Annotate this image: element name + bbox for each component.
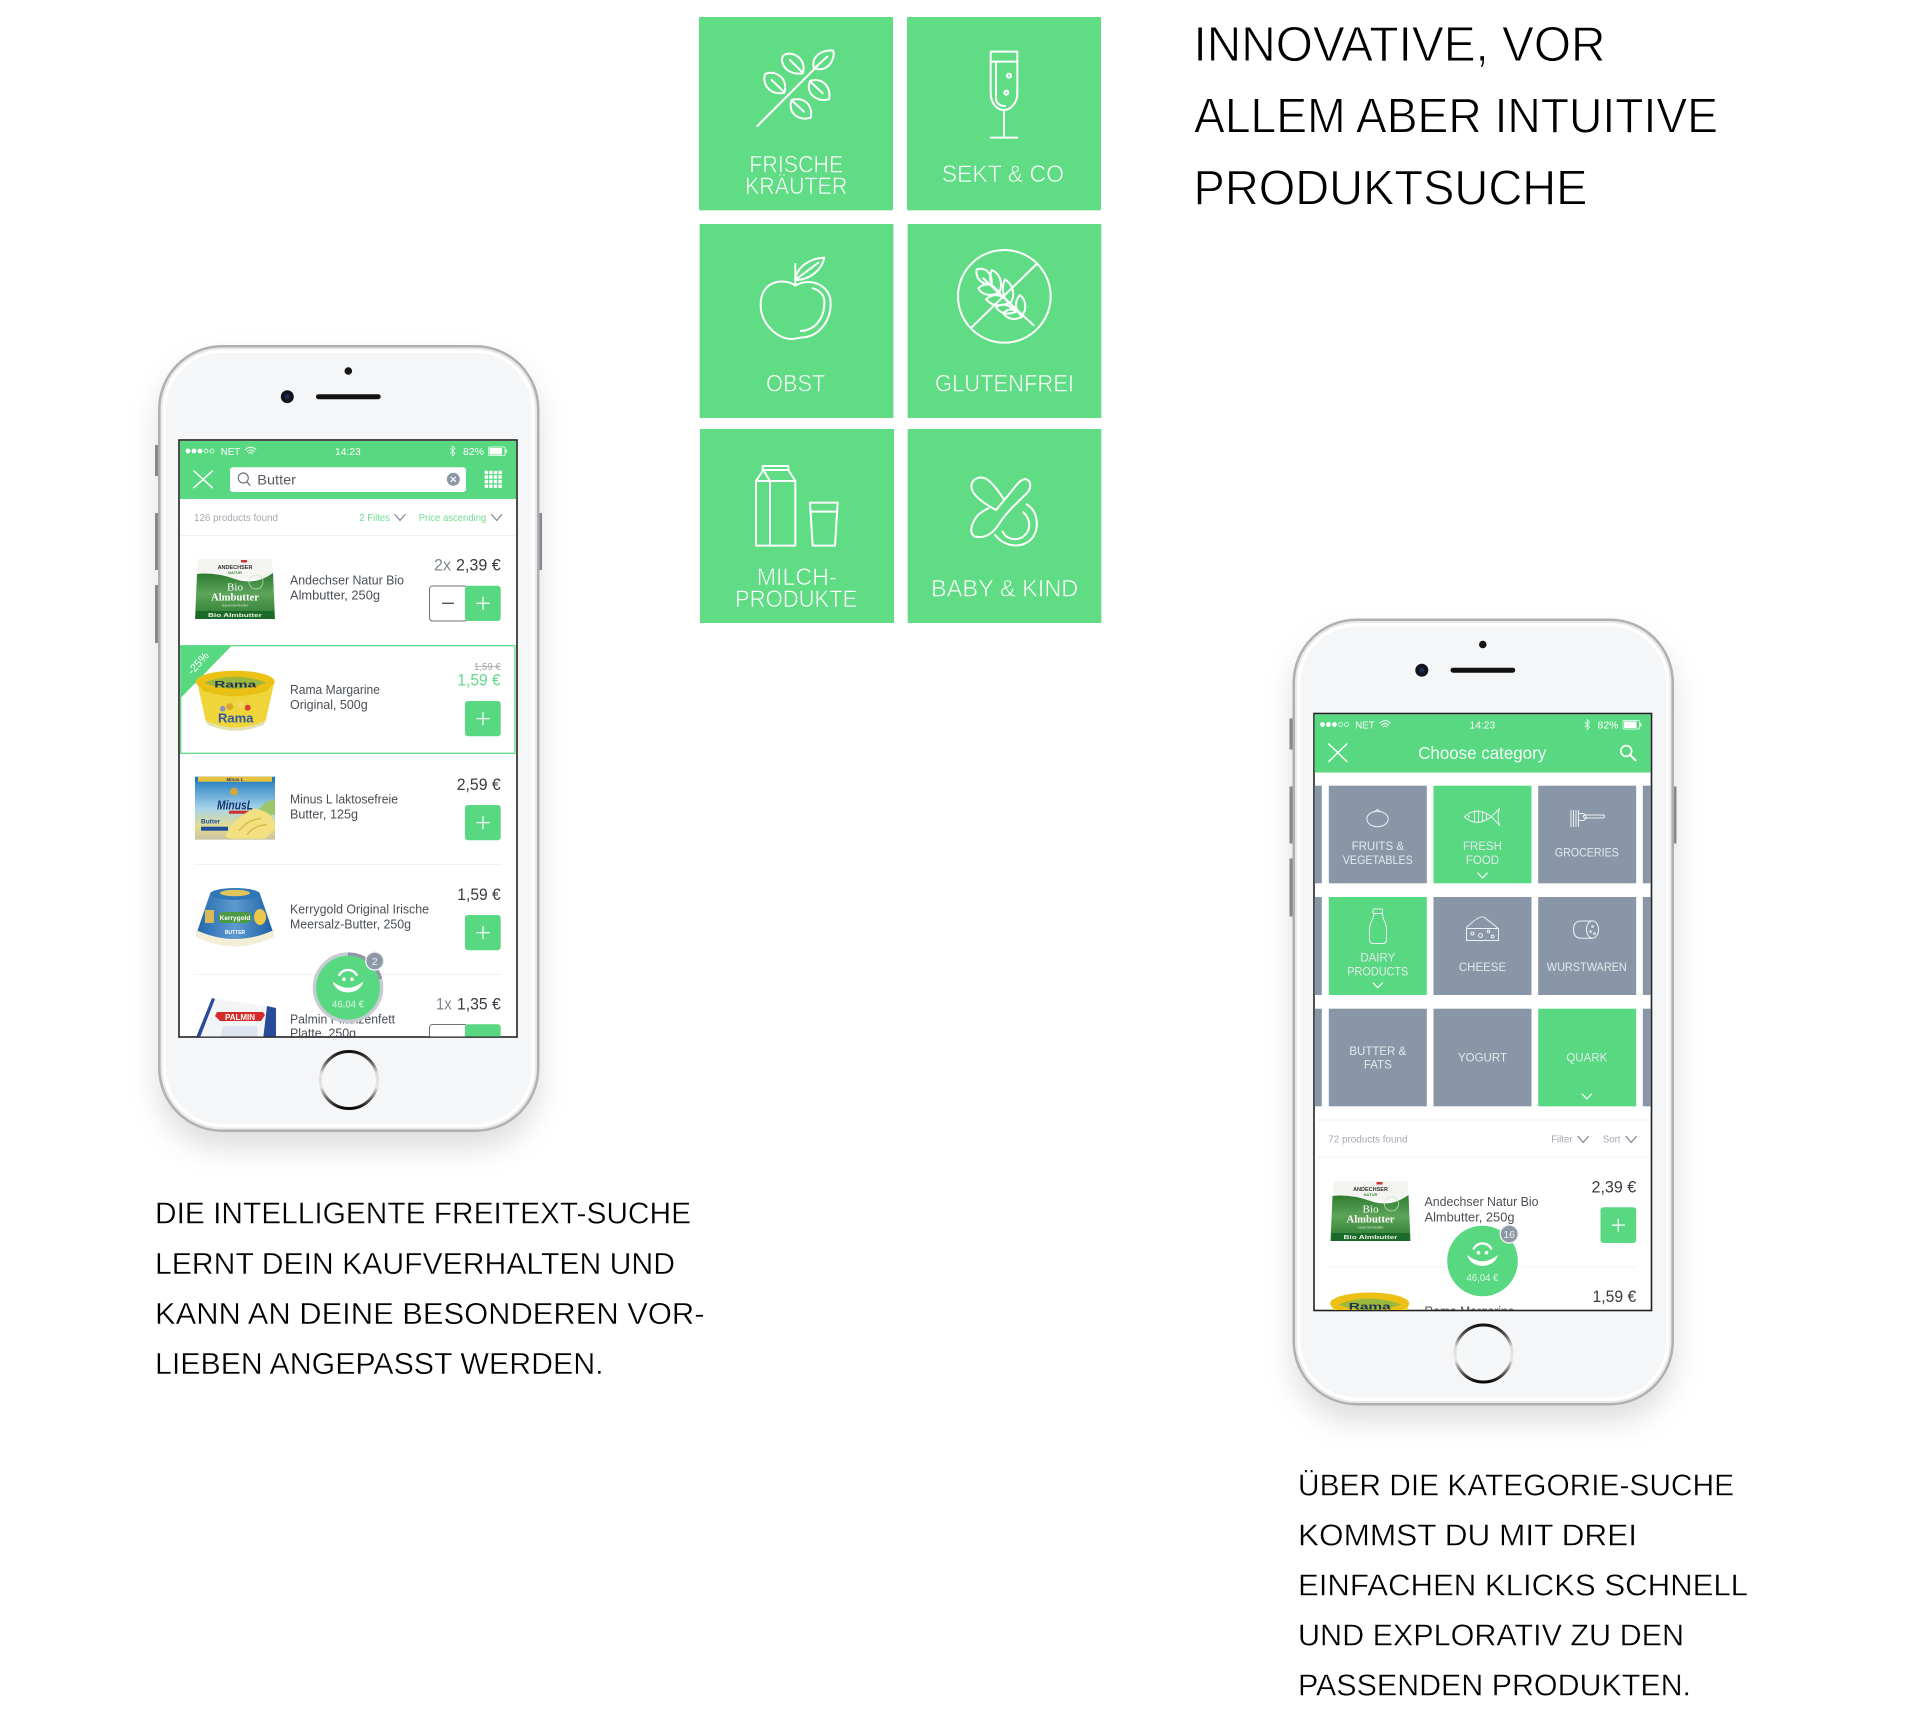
title: innovative product search: INNOVATIVE, VOR — [1194, 17, 1606, 72]
icon: pacifier — [971, 478, 1037, 545]
tile: groceries: GROCERIES — [1555, 848, 1619, 860]
icon: milk carton and glass — [756, 466, 838, 546]
product image: rama tub: Rama — [214, 680, 257, 691]
product image: andechser butter: Sauerrahmbutter — [1357, 1226, 1384, 1230]
product row: palmin — [196, 998, 501, 1036]
product image: andechser butter — [1330, 1181, 1410, 1241]
label: KRÄUTER — [745, 173, 847, 200]
tile: butter and fats: BUTTER & — [1349, 1046, 1407, 1058]
product image: andechser butter: Bio — [227, 582, 243, 594]
tile: wurstwaren — [1538, 897, 1636, 995]
tile: fresh food: FOOD — [1466, 855, 1499, 867]
tile: yogurt — [1434, 1009, 1532, 1106]
product name: Butter, 125g — [290, 806, 358, 821]
tile: groceries — [1538, 786, 1636, 883]
product image: andechser butter: Bio Almbutter — [208, 613, 263, 619]
status bar: 14:23 — [1470, 720, 1495, 732]
cart button — [1447, 1225, 1518, 1296]
label: MILCH- — [757, 565, 837, 591]
price with old price: 1,59 € — [457, 672, 501, 690]
panel: category tiles — [699, 17, 1101, 623]
item count badge: 16 — [1503, 1229, 1515, 1241]
tile: fruits and vegetables: FRUITS & — [1352, 841, 1404, 853]
tile: cheese: CHEESE — [1459, 962, 1506, 974]
product name: Minus L laktosefreie — [290, 791, 398, 806]
price: 2,39 € — [1592, 1178, 1636, 1196]
status bar: 14:23 — [335, 446, 361, 458]
phone frame — [1290, 618, 1676, 1406]
product image: rama tub — [1330, 1292, 1409, 1350]
icon: sausage — [1574, 921, 1598, 938]
product row: andechser — [1328, 1178, 1636, 1268]
phone: free text search — [155, 345, 542, 1132]
text block: category search description: PASSENDEN PRODUKTEN. — [1298, 1668, 1691, 1703]
result toolbar: 2 Filtes — [359, 512, 390, 524]
text block: free text search description: LERNT DEIN KAUFVERHALTEN UND — [155, 1246, 675, 1281]
quantity stepper — [430, 586, 501, 621]
result toolbar: Sort — [1603, 1134, 1621, 1146]
product image: andechser butter: NATUR — [1364, 1192, 1377, 1197]
price — [437, 998, 500, 1012]
price with old price — [458, 663, 501, 688]
search box — [230, 467, 466, 492]
label: GLUTENFREI — [935, 371, 1074, 397]
tile: quark: QUARK — [1566, 1053, 1608, 1065]
tile: fresh food: FRESH — [1463, 841, 1502, 853]
status bar: 82% — [1598, 720, 1618, 732]
product name — [291, 904, 428, 931]
product name — [291, 794, 398, 821]
discount ribbon — [181, 646, 232, 698]
result toolbar — [1314, 1120, 1650, 1158]
result toolbar: 126 products found — [194, 512, 278, 524]
product name: Andechser Natur Bio — [1424, 1194, 1538, 1209]
tile: cheese — [1434, 897, 1532, 995]
status bar — [186, 446, 507, 458]
text block: free text search description: KANN AN DEINE BESONDEREN VOR- — [155, 1296, 704, 1331]
icon: search — [1621, 746, 1636, 760]
text block: category search description — [1298, 1468, 1748, 1703]
text block: free text search description: DIE INTELLIGENTE FREITEXT-SUCHE — [155, 1195, 691, 1230]
product image: palmin pack: PALMIN — [225, 1013, 255, 1022]
tile: dairy products: DAIRY — [1360, 952, 1396, 964]
price: 2x — [434, 557, 452, 575]
icon: apple — [761, 258, 831, 339]
product image: andechser butter: Bio Almbutter — [1344, 1235, 1399, 1241]
text block: category search description: ÜBER DIE KATEGORIE-SUCHE — [1298, 1468, 1734, 1503]
tile: butter and fats: FATS — [1364, 1060, 1392, 1072]
tile: yogurt: YOGURT — [1458, 1053, 1507, 1065]
icon: close — [1329, 744, 1347, 762]
tile: fruits and vegetables — [1329, 786, 1427, 883]
tile: milchprodukte — [700, 429, 894, 623]
label: BABY & KIND — [931, 576, 1078, 602]
category grid — [1314, 786, 1650, 1106]
price: 1,59 € — [457, 886, 501, 904]
title: innovative product search: PRODUKTSUCHE — [1194, 160, 1588, 216]
item count badge: 2 — [372, 956, 378, 968]
status bar: NET — [1355, 720, 1375, 732]
icon: fish — [1464, 808, 1500, 826]
product image: rama tub: Rama — [218, 711, 254, 726]
icon: close — [194, 471, 212, 488]
tile: butter and fats — [1329, 1009, 1427, 1106]
product image: kerrygold tub: BUTTER — [225, 930, 246, 936]
label: PRODUKTE — [735, 587, 857, 613]
product name: Rama Margarine — [1424, 1304, 1514, 1318]
header title: Choose category — [1418, 743, 1546, 763]
product image: andechser butter: ANDECHSER — [1353, 1187, 1388, 1193]
price: 1,35 € — [457, 995, 501, 1013]
add button — [465, 805, 501, 840]
product row: minus l — [194, 776, 501, 865]
product image: palmin pack — [196, 998, 276, 1036]
status bar: 82% — [463, 446, 484, 458]
tile: glutenfrei — [908, 224, 1101, 418]
product name — [290, 684, 380, 712]
product row: kerrygold — [194, 886, 501, 975]
tile: frische kraeuter — [699, 17, 893, 210]
icon: crossed wheat — [958, 250, 1051, 343]
tile: fresh food — [1434, 786, 1532, 883]
icon: bottle — [1370, 909, 1386, 944]
price: 2,59 € — [457, 776, 501, 794]
product image: andechser butter: Bio — [1363, 1204, 1379, 1216]
product image: andechser butter: Almbutter — [1346, 1214, 1395, 1226]
product image: andechser butter — [195, 559, 275, 619]
icon: champagne flute — [991, 52, 1017, 138]
product image: minus l butter: Butter — [201, 819, 221, 826]
icon: smile — [1467, 1243, 1498, 1266]
cart button: 46,04 € — [1466, 1272, 1499, 1284]
add button — [465, 701, 501, 736]
product row: rama partly visible — [1330, 1288, 1636, 1350]
product name: Platte, 250g — [290, 1025, 356, 1040]
product image: minus l butter: Minus L — [226, 777, 244, 782]
product name: Almbutter, 250g — [290, 587, 380, 602]
app header — [1314, 714, 1650, 772]
product image: kerrygold tub — [196, 888, 274, 946]
product image: minus l butter — [195, 777, 275, 840]
label: SEKT & CO — [942, 162, 1064, 188]
tile: dairy products — [1329, 897, 1427, 995]
status bar: NET — [221, 446, 241, 458]
product image: andechser butter: Almbutter — [211, 592, 259, 604]
text block: free text search description — [155, 1195, 704, 1381]
title: innovative product search — [1194, 17, 1718, 216]
icon: tomato — [1367, 810, 1388, 827]
price: 1x — [436, 995, 452, 1013]
quantity stepper — [429, 1024, 501, 1036]
price: 1,59 € — [1592, 1288, 1636, 1306]
tile: quark — [1538, 1009, 1636, 1106]
icon: pasta fork — [1571, 810, 1604, 826]
product name: Almbutter, 250g — [1424, 1209, 1514, 1224]
product image: andechser butter: Sauerrahmbutter — [222, 604, 249, 608]
text block: category search description: UND EXPLORATIV ZU DEN — [1298, 1618, 1684, 1653]
product image: rama tub: Rama — [1349, 1302, 1392, 1312]
tile: dairy products: PRODUCTS — [1347, 966, 1409, 978]
label — [745, 152, 847, 200]
search box: Butter — [257, 471, 296, 487]
text block: free text search description: LIEBEN ANGEPASST WERDEN. — [155, 1346, 604, 1381]
product name: Kerrygold Original Irische — [290, 901, 429, 916]
icon: smile — [333, 970, 363, 992]
icon: cheese — [1466, 917, 1498, 940]
product name — [291, 1014, 395, 1036]
result toolbar — [180, 512, 516, 536]
product image: andechser butter: NATUR — [228, 570, 242, 575]
product image: minus l butter: MinusL — [217, 798, 253, 813]
product row: andechser — [195, 557, 501, 621]
product name: Rama Margarine — [290, 682, 380, 697]
price: 2,39 € — [456, 557, 501, 575]
label — [735, 565, 857, 613]
text block: category search description: KOMMST DU MIT DREI — [1298, 1518, 1637, 1553]
product name: Meersalz-Butter, 250g — [290, 917, 411, 932]
product image: andechser butter: ANDECHSER — [218, 565, 252, 571]
price — [434, 559, 500, 573]
add button — [1600, 1207, 1636, 1243]
screen — [179, 440, 517, 1054]
text block: category search description: EINFACHEN KLICKS SCHNELL — [1298, 1568, 1748, 1603]
product image: kerrygold tub: Kerrygold — [220, 915, 250, 922]
status bar — [1320, 720, 1641, 732]
product name — [1424, 1194, 1538, 1224]
app header — [180, 440, 516, 499]
screen — [1314, 714, 1652, 1350]
product name — [290, 575, 404, 602]
tile: fruits and vegetables: VEGETABLES — [1343, 855, 1413, 867]
product name: Andechser Natur Bio — [290, 572, 404, 587]
product image: rama tub — [196, 671, 275, 731]
label: OBST — [766, 371, 825, 397]
icon: grid — [485, 471, 502, 488]
phone frame — [155, 345, 542, 1132]
result toolbar: Price ascending — [419, 512, 486, 524]
icon: herb sprig — [757, 51, 834, 126]
phone: category search — [1290, 618, 1676, 1406]
discount ribbon: -25% — [186, 650, 212, 677]
label: FRISCHE — [749, 152, 843, 178]
tile: sekt und co — [907, 17, 1101, 210]
result toolbar: 72 products found — [1328, 1134, 1408, 1146]
price with old price: 1,59 € — [474, 662, 501, 673]
tile: obst — [700, 224, 893, 418]
product row: rama highlighted — [181, 646, 515, 753]
product name: Palmin Pflanzenfett — [290, 1011, 395, 1026]
tile: wurstwaren: WURSTWAREN — [1547, 962, 1627, 974]
result toolbar: Filter — [1551, 1134, 1573, 1146]
product name: Original, 500g — [290, 697, 368, 712]
tile: baby und kind — [908, 429, 1101, 623]
add button — [465, 915, 501, 950]
title: innovative product search: ALLEM ABER INTUITIVE — [1194, 89, 1718, 144]
cart button — [314, 952, 384, 1021]
cart button: 46,04 € — [332, 999, 364, 1011]
